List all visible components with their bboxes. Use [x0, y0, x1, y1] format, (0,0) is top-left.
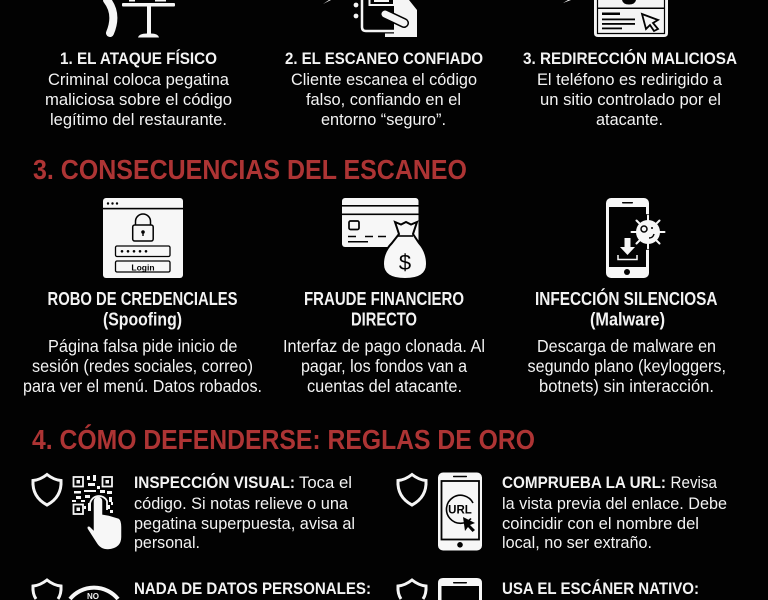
icon: credit card and money bag	[342, 198, 427, 279]
icon: shield 1	[33, 474, 61, 505]
icon: hand scanning with phone	[323, 0, 417, 37]
text: credential theft: para ver el menú. Datos robados.	[23, 376, 262, 396]
text: financial fraud: DIRECTO	[351, 310, 417, 330]
text: credential theft: sesión (redes sociales, correo)	[32, 356, 253, 376]
text: check URL	[502, 473, 727, 552]
text: check URL: coincidir con el nombre del	[502, 514, 699, 533]
text: financial fraud	[283, 289, 485, 396]
panel: consequences	[23, 198, 726, 396]
text: visual inspection: Toca el	[299, 473, 352, 492]
text: check URL: la vista previa del enlace. Debe	[502, 494, 727, 513]
text: step 3: un sitio controlado por el	[540, 90, 721, 109]
icon: QR code with pointing hand	[72, 475, 122, 550]
text: step 2	[285, 49, 483, 129]
icon: credit card and money bag: $	[399, 250, 411, 275]
text: step 3	[523, 49, 737, 129]
text: silent infection: segundo plano (keyloggers,	[528, 356, 726, 376]
icon: fake login window	[103, 198, 183, 278]
text: no personal data: NADA DE DATOS PERSONALES:	[134, 579, 371, 598]
text: visual inspection: código. Si notas relieve o una	[134, 494, 349, 513]
text: step 3: El teléfono es redirigido a	[537, 70, 723, 89]
text: step 2: Cliente escanea el código	[291, 70, 477, 89]
icon: malicious browser window	[563, 0, 668, 37]
heading: section 3: 3. CONSECUENCIAS DEL ESCANEO	[33, 154, 467, 185]
text: silent infection	[528, 288, 726, 396]
icon: no personal data sign	[70, 588, 118, 600]
text: native scanner: USA EL ESCÁNER NATIVO:	[502, 579, 699, 598]
text: financial fraud: cuentas del atacante.	[307, 376, 462, 396]
text: financial fraud: FRAUDE FINANCIERO	[304, 289, 464, 309]
text: credential theft: Página falsa pide inicio de	[48, 336, 238, 356]
text: silent infection: botnets) sin interacción.	[539, 376, 714, 396]
panel: golden rules	[33, 472, 727, 600]
icon: criminal and restaurant table	[107, 0, 175, 38]
text: check URL: COMPRUEBA LA URL:	[502, 473, 666, 492]
text: silent infection: Descarga de malware en	[537, 336, 716, 356]
text: check URL: Revisa	[670, 473, 718, 492]
text: step 1: Criminal coloca pegatina	[48, 70, 230, 89]
text: step 1: 1. EL ATAQUE FÍSICO	[60, 49, 217, 68]
icon: fake login window: Login	[131, 262, 155, 272]
text: step 2: falso, confiando en el	[306, 90, 461, 109]
text: silent infection: (Malware)	[590, 310, 665, 330]
text: financial fraud: Interfaz de pago clonada. Al	[283, 336, 485, 356]
text: step 2: entorno “seguro”.	[321, 110, 446, 129]
text: step 1: legítimo del restaurante.	[50, 110, 227, 129]
text: visual inspection: personal.	[134, 533, 200, 552]
icon: phone native scanner	[438, 578, 482, 600]
text: visual inspection	[134, 473, 355, 552]
text: financial fraud: pagar, los fondos van a	[301, 356, 467, 376]
text: step 3: 3. REDIRECCIÓN MALICIOSA	[523, 49, 737, 68]
icon: phone with virus	[606, 198, 666, 278]
icon: phone with URL	[438, 472, 482, 550]
text: credential theft: ROBO DE CREDENCIALES	[48, 289, 238, 309]
text: step 1	[45, 49, 232, 129]
panel: attack steps	[45, 0, 737, 129]
icon: shield 4	[398, 580, 426, 599]
text: credential theft	[23, 289, 262, 396]
text: visual inspection: pegatina superpuesta, avisa al	[134, 514, 355, 533]
icon: phone with URL: URL	[448, 504, 472, 516]
icon: shield 3	[33, 580, 61, 599]
text: visual inspection: INSPECCIÓN VISUAL:	[134, 473, 295, 492]
text: silent infection: INFECCIÓN SILENCIOSA	[535, 288, 718, 309]
heading: section 4: 4. CÓMO DEFENDERSE: REGLAS DE ORO	[32, 424, 535, 455]
text: credential theft: (Spoofing)	[103, 310, 182, 330]
text: step 3: atacante.	[596, 110, 663, 129]
text: check URL: local, no ser extraño.	[502, 533, 652, 552]
icon: shield 2	[398, 474, 426, 505]
text: step 1: maliciosa sobre el código	[45, 90, 232, 109]
text: step 2: 2. EL ESCANEO CONFIADO	[285, 49, 483, 68]
